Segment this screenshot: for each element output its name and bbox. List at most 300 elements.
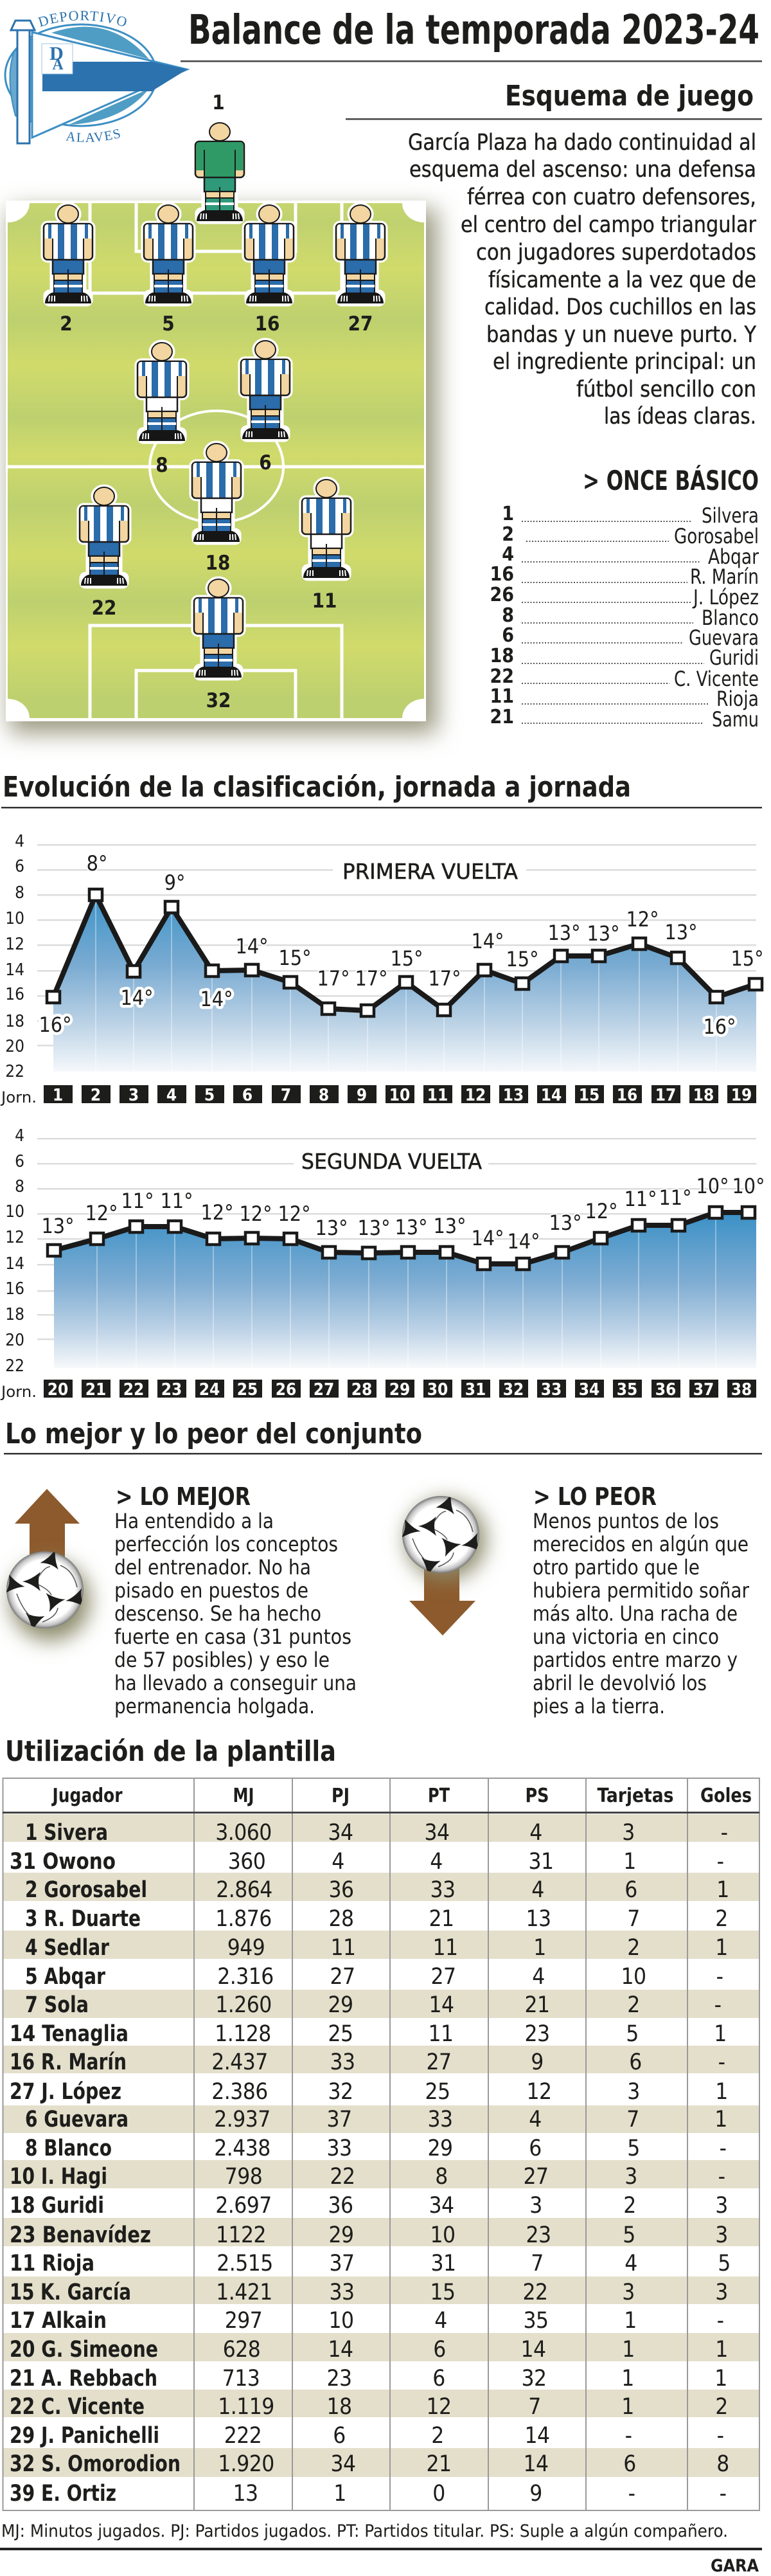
table header: Jugador [51, 1785, 123, 1807]
row: 17 Alkain [10, 2308, 723, 2334]
shirt numbers: 22 [92, 597, 116, 620]
jornada axis: 20 to 38: 21 [85, 1380, 106, 1400]
row: 31 Owono: 4 [332, 1849, 344, 1875]
text block: lo peor: hubiera permitido soñar [533, 1578, 749, 1603]
text block: esquema description: fútbol sencillo con [576, 377, 756, 402]
row: 32 S. Omorodion: 14 [523, 2451, 549, 2477]
row: 5 Abqar: 27 [330, 1964, 355, 1990]
row: 31 Owono: 4 [430, 1849, 443, 1875]
jornada axis: 1 to 19: 11 [427, 1086, 448, 1105]
chart: primera vuelta: 22 [5, 1062, 24, 1081]
row: 10 I. Hagi: 27 [523, 2164, 549, 2190]
row: 14 Tenaglia: 11 [428, 2021, 454, 2047]
jornada axis: 20 to 38: 32 [503, 1380, 524, 1400]
club crest: Deportivo Alavés: ALAVES [66, 129, 120, 142]
row: 5 Abqar: 2.316 [217, 1964, 274, 1990]
row: 6 Guevara: 2.937 [214, 2107, 270, 2132]
row: 2 Gorosabel [25, 1877, 729, 1903]
row: 17 Alkain: 4 [434, 2308, 447, 2334]
row: 18 Guridi: 2 [623, 2193, 636, 2219]
row: 8 Blanco: 5 [627, 2136, 640, 2161]
chart: segunda vuelta: 6 [15, 1152, 24, 1171]
chart: primera vuelta [5, 832, 764, 1081]
chart: primera vuelta: PRIMERA VUELTA [342, 859, 518, 884]
list: once básico: 11 [490, 685, 514, 708]
text block: lo mejor: permanencia holgada. [114, 1694, 315, 1718]
row: 31 Owono: 31 [528, 1849, 554, 1875]
jornada axis: 1 to 19: 5 [204, 1086, 215, 1105]
list: once básico: R. Marín [690, 564, 759, 589]
chart: primera vuelta: 16° [39, 1013, 72, 1037]
player: midfielder 6 [241, 341, 290, 439]
row: 21 A. Rebbach: 21 A. Rebbach [10, 2366, 157, 2391]
chart: segunda vuelta: 12° [585, 1199, 618, 1223]
chart: primera vuelta: 14 [5, 960, 24, 980]
jornada axis: 20 to 38: 24 [199, 1380, 220, 1400]
chart: primera vuelta: 15° [731, 946, 764, 971]
jornada axis: 20 to 38: 31 [465, 1380, 486, 1400]
text block: esquema description: físicamente a la vez que de [488, 267, 756, 293]
footnote: table legend: MJ: Minutos jugados. PJ: Partidos jugados. PT: Partidos titular. PS: Suple a algún compañero. [1, 2521, 728, 2541]
row: 29 J. Panichelli [10, 2423, 723, 2449]
row: 14 Tenaglia: 1.128 [215, 2021, 271, 2047]
icon: arrow up with ball [6, 1489, 90, 1641]
row: 21 A. Rebbach [10, 2366, 727, 2391]
list: once básico [490, 503, 759, 732]
row: 5 Abqar: - [716, 1964, 723, 1990]
text block: lo peor: una victoria en cinco [533, 1625, 719, 1649]
row: 4 Sedlar: 1 [715, 1935, 728, 1961]
shirt numbers: 16 [255, 312, 279, 336]
row: 16 R. Marín: 9 [531, 2049, 544, 2075]
row: 16 R. Marín: 16 R. Marín [10, 2049, 127, 2075]
chart: segunda vuelta: 8 [15, 1177, 24, 1196]
text block: esquema description [408, 130, 757, 429]
jornada axis: 1 to 19: 3 [128, 1086, 139, 1105]
player: winger 11 [302, 480, 351, 578]
row: 22 C. Vicente: 18 [326, 2394, 352, 2420]
row: 29 J. Panichelli: 2 [431, 2423, 444, 2449]
row: 18 Guridi: 2.697 [215, 2193, 272, 2219]
text block: lo mejor: descenso. Se ha hecho [114, 1601, 321, 1626]
player: defender 27 [336, 205, 385, 303]
chart: segunda vuelta: 13° [549, 1211, 582, 1235]
row: 16 R. Marín: - [718, 2049, 725, 2075]
row: 21 A. Rebbach: 1 [621, 2366, 634, 2391]
jornada axis: 20 to 38: 38 [731, 1380, 752, 1400]
jornada axis: 1 to 19: 15 [579, 1086, 599, 1105]
list: once básico: Guevara [689, 626, 759, 650]
text block: lo mejor [114, 1482, 357, 1718]
row: 2 Gorosabel: 1 [716, 1877, 729, 1903]
chart: primera vuelta: 13° [664, 920, 698, 944]
chart: segunda vuelta: 13° [357, 1216, 391, 1240]
row: 27 J. López: 25 [425, 2079, 450, 2105]
row: 2 Gorosabel: 36 [328, 1877, 354, 1903]
jornada axis: 1 to 19: 8 [319, 1086, 329, 1105]
chart: primera vuelta: 4 [15, 832, 24, 851]
jornada axis: 20 to 38: 27 [314, 1380, 334, 1400]
row: 27 J. López: 3 [627, 2079, 640, 2105]
row: 6 Guevara: 7 [626, 2107, 639, 2132]
text block: esquema description: férrea con cuatro defensores, [467, 185, 756, 210]
panel: football pitch [6, 201, 437, 733]
row: 32 S. Omorodion: 34 [330, 2451, 356, 2477]
table header [51, 1785, 752, 1807]
jornada axis: 20 to 38: 36 [655, 1380, 676, 1400]
row: 20 G. Simeone: 6 [433, 2337, 446, 2363]
row: 4 Sedlar: 11 [432, 1935, 458, 1961]
row: 23 Benavídez: 3 [715, 2222, 728, 2248]
row: 39 E. Ortiz: 13 [233, 2481, 258, 2507]
row: 4 Sedlar: 4 Sedlar [25, 1935, 109, 1961]
row: 31 Owono: - [717, 1849, 723, 1875]
row: 22 C. Vicente: 1.119 [218, 2394, 274, 2420]
row: 20 G. Simeone [10, 2337, 728, 2363]
row: 1 Sivera [25, 1820, 727, 1846]
row: 20 G. Simeone: 20 G. Simeone [10, 2337, 158, 2363]
row: 16 R. Marín: 33 [330, 2049, 355, 2075]
row: 1 Sivera: - [721, 1820, 727, 1846]
chart: primera vuelta: 15° [506, 947, 539, 971]
table header: PT [428, 1785, 450, 1807]
jornada axis: 20 to 38: 25 [237, 1380, 258, 1400]
row: 1 Sivera: 3 [622, 1820, 635, 1846]
row: 11 Rioja: 5 [718, 2251, 731, 2276]
chart: segunda vuelta: 16 [5, 1279, 24, 1299]
text block: lo peor: abril le devolvió los [533, 1671, 707, 1695]
chart: segunda vuelta: 11° [160, 1189, 193, 1213]
text block: lo mejor: de 57 posibles) y eso le [114, 1648, 330, 1672]
row: 22 C. Vicente: 12 [426, 2394, 452, 2420]
chart: segunda vuelta: SEGUNDA VUELTA [301, 1149, 483, 1174]
row: 31 Owono: 360 [228, 1849, 265, 1875]
row: 7 Sola: 21 [524, 1992, 550, 2018]
row: 39 E. Ortiz [10, 2481, 726, 2507]
shirt numbers: 8 [155, 454, 168, 477]
row: 16 R. Marín [10, 2049, 725, 2075]
chart: segunda vuelta: 10° [696, 1174, 729, 1198]
row: 11 Rioja: 4 [625, 2251, 637, 2276]
list: once básico: Rioja [716, 687, 759, 711]
club crest: Deportivo Alavés [4, 10, 190, 144]
chart: segunda vuelta: 18 [5, 1305, 24, 1324]
row: 7 Sola: - [714, 1992, 721, 2018]
row: 14 Tenaglia: 1 [714, 2021, 727, 2047]
row: 6 Guevara: 37 [326, 2107, 352, 2132]
row: 2 Gorosabel: 2 Gorosabel [25, 1877, 147, 1903]
row: 23 Benavídez [10, 2222, 728, 2248]
row: 3 R. Duarte: 3 R. Duarte [25, 1906, 141, 1932]
player: striker 32 [194, 579, 243, 678]
chart: segunda vuelta: 4 [15, 1126, 24, 1146]
player: forward 18 [192, 444, 241, 542]
row: 15 K. García [10, 2280, 728, 2305]
row: 15 K. García: 1.421 [216, 2280, 272, 2305]
row: 7 Sola: 14 [429, 1992, 454, 2018]
row: 22 C. Vicente: 22 C. Vicente [10, 2394, 145, 2420]
chart: segunda vuelta: 14° [471, 1226, 504, 1250]
text block: lo mejor: del entrenador. No ha [114, 1555, 311, 1580]
jornada axis: 1 to 19: 10 [389, 1086, 410, 1105]
chart: segunda vuelta: 12° [239, 1202, 272, 1226]
row: 27 J. López: 12 [526, 2079, 552, 2105]
row: 14 Tenaglia: 23 [524, 2021, 550, 2047]
chart: segunda vuelta: 11° [121, 1189, 154, 1213]
text block: lo mejor: > LO MEJOR [116, 1482, 251, 1511]
row: 5 Abqar: 4 [532, 1964, 545, 1990]
row: 11 Rioja: 2.515 [217, 2251, 273, 2276]
row: 11 Rioja: 31 [430, 2251, 456, 2276]
row: 27 J. López: 1 [715, 2079, 728, 2105]
chart: segunda vuelta: 10° [732, 1174, 765, 1198]
row: 32 S. Omorodion: 1.920 [218, 2451, 274, 2477]
row: 14 Tenaglia [10, 2021, 727, 2047]
row: 3 R. Duarte: 21 [429, 1906, 454, 1932]
chart: segunda vuelta [5, 1126, 765, 1376]
text block: lo peor: pies a la tierra. [533, 1694, 665, 1718]
list: once básico: Blanco [702, 606, 759, 630]
text block: lo mejor: pisado en puestos de [114, 1578, 308, 1603]
list: once básico: 18 [490, 645, 514, 667]
shirt numbers: 6 [259, 451, 272, 474]
jornada axis: 1 to 19: 19 [731, 1086, 752, 1105]
row: 17 Alkain: 10 [328, 2308, 354, 2334]
row: 23 Benavídez: 23 Benavídez [10, 2222, 151, 2248]
row: 11 Rioja: 7 [531, 2251, 544, 2276]
row: 2 Gorosabel: 2.864 [216, 1877, 272, 1903]
row: 3 R. Duarte [25, 1906, 728, 1932]
row: 27 J. López: 27 J. López [10, 2079, 121, 2105]
row: 3 R. Duarte: 7 [627, 1906, 640, 1932]
row: 39 E. Ortiz: 39 E. Ortiz [10, 2481, 116, 2507]
text block: esquema description: bandas y un nueve purto. Y [486, 322, 757, 348]
list: once básico: C. Vicente [674, 667, 759, 691]
row: 5 Abqar [25, 1964, 723, 1990]
player: defender 16 [245, 205, 294, 303]
jornada axis: 1 to 19 [0, 1085, 756, 1106]
chart: primera vuelta: 14° [471, 929, 504, 953]
row: 15 K. García: 33 [329, 2280, 355, 2305]
row: 21 A. Rebbach: 6 [432, 2366, 445, 2391]
row: 29 J. Panichelli: 29 J. Panichelli [10, 2423, 159, 2449]
chart: primera vuelta: 20 [5, 1037, 24, 1056]
row: 6 Guevara: 1 [714, 2107, 727, 2132]
jornada axis: 1 to 19: Jorn. [0, 1088, 37, 1106]
row: 14 Tenaglia: 14 Tenaglia [10, 2021, 128, 2047]
shirt numbers: 2 [60, 312, 73, 336]
row: 20 G. Simeone: 1 [622, 2337, 635, 2363]
jornada axis: 20 to 38: 20 [48, 1380, 68, 1400]
chart: primera vuelta: 17° [428, 966, 461, 991]
shirt numbers: 27 [348, 312, 373, 336]
chart: primera vuelta: 13° [547, 921, 581, 945]
list: once básico: Samu [712, 707, 759, 732]
row: 10 I. Hagi: 10 I. Hagi [10, 2164, 107, 2190]
row: 10 I. Hagi [10, 2164, 725, 2190]
row: 7 Sola: 2 [627, 1992, 640, 2018]
row: 8 Blanco: - [720, 2136, 726, 2161]
row: 16 R. Marín: 2.437 [211, 2049, 268, 2075]
chart: segunda vuelta: 13° [433, 1214, 466, 1238]
chart: primera vuelta: 12° [626, 907, 659, 932]
row: 17 Alkain: - [717, 2308, 723, 2334]
row: 18 Guridi: 3 [715, 2193, 728, 2219]
row: 4 Sedlar: 2 [627, 1935, 640, 1961]
list: once básico: 22 [490, 665, 514, 688]
jornada axis: 1 to 19: 4 [166, 1086, 177, 1105]
row: 20 G. Simeone: 1 [715, 2337, 728, 2363]
jornada axis: 20 to 38: 29 [389, 1380, 410, 1400]
club crest: Deportivo Alavés: DEPORTIVO [37, 10, 127, 27]
jornada axis: 1 to 19: 17 [655, 1086, 676, 1105]
list: once básico: Silvera [702, 503, 759, 528]
shirt numbers [60, 91, 373, 712]
row: 29 J. Panichelli: 6 [333, 2423, 346, 2449]
text block: esquema description: con jugadores superdotados [476, 240, 756, 266]
text block: lo peor: más alto. Una racha de [533, 1601, 738, 1626]
row: 23 Benavídez: 29 [328, 2222, 354, 2248]
list: once básico: 4 [502, 543, 514, 566]
row: 15 K. García: 3 [622, 2280, 635, 2305]
row: 6 Guevara [25, 2107, 727, 2132]
list: once básico: 1 [502, 503, 514, 525]
list: once básico: 26 [490, 584, 514, 606]
row: 27 J. López [10, 2079, 728, 2105]
shirt numbers: 32 [206, 689, 231, 712]
player: winger 22 [80, 487, 128, 586]
chart: segunda vuelta: 22 [5, 1356, 24, 1376]
list: once básico: 2 [502, 523, 514, 546]
list: once básico: 21 [490, 706, 514, 728]
row: 10 I. Hagi: - [718, 2164, 725, 2190]
chart: segunda vuelta: 14° [507, 1229, 540, 1254]
row: 1 Sivera: 3.060 [215, 1820, 272, 1846]
row: 21 A. Rebbach: 713 [222, 2366, 260, 2391]
row: 39 E. Ortiz: 9 [529, 2481, 542, 2507]
row: 20 G. Simeone: 14 [328, 2337, 353, 2363]
chart: primera vuelta: 14° [200, 987, 233, 1011]
row: 6 Guevara: 6 Guevara [25, 2107, 128, 2132]
jornada axis: 20 to 38: 30 [427, 1380, 448, 1400]
row: 4 Sedlar: 1 [533, 1935, 546, 1961]
jornada axis: 1 to 19: 18 [693, 1086, 714, 1105]
player: goalkeeper 1 [195, 123, 244, 221]
row: 31 Owono: 31 Owono [10, 1849, 116, 1875]
row: 1 Sivera: 34 [328, 1820, 353, 1846]
chart: segunda vuelta: 12° [85, 1201, 118, 1225]
row: 32 S. Omorodion: 32 S. Omorodion [10, 2451, 181, 2477]
list: once básico: Guridi [709, 645, 759, 670]
chart: primera vuelta: 14° [235, 934, 269, 959]
row: 2 Gorosabel: 6 [625, 1877, 637, 1903]
chart: primera vuelta: 13° [587, 921, 620, 946]
row: 8 Blanco: 8 Blanco [25, 2136, 112, 2161]
club crest: Deportivo Alavés: A [52, 57, 64, 73]
text block: lo peor: otro partido que le [533, 1555, 700, 1580]
text block: esquema description: el ingrediente principal: un [493, 349, 756, 375]
row: 17 Alkain: 297 [225, 2308, 262, 2334]
list: once básico: 16 [490, 563, 514, 586]
row: 15 K. García: 15 [430, 2280, 456, 2305]
text block: esquema description: García Plaza ha dado continuidad al [408, 130, 756, 156]
row: 29 J. Panichelli: - [717, 2423, 723, 2449]
row: 39 E. Ortiz: 0 [432, 2481, 445, 2507]
row: 8 Blanco: 29 [427, 2136, 453, 2161]
row: 32 S. Omorodion: 8 [716, 2451, 729, 2477]
row: 32 S. Omorodion [10, 2451, 729, 2477]
text block: lo peor [533, 1482, 749, 1718]
chart: primera vuelta: 15° [278, 946, 312, 970]
row: 14 Tenaglia: 5 [626, 2021, 639, 2047]
jornada axis: 20 to 38: 35 [617, 1380, 637, 1400]
jornada axis: 20 to 38 [0, 1380, 756, 1401]
row: 15 K. García: 3 [715, 2280, 728, 2305]
text block: esquema description: el centro del campo triangular [461, 212, 756, 238]
text block: lo peor: partidos entre marzo y [533, 1648, 738, 1672]
row: 18 Guridi: 3 [529, 2193, 542, 2219]
row: 22 C. Vicente: 7 [528, 2394, 541, 2420]
row: 21 A. Rebbach: 23 [326, 2366, 352, 2391]
row: 27 J. López: 2.386 [211, 2079, 268, 2105]
chart: primera vuelta: 17° [317, 966, 350, 991]
chart: primera vuelta: 6 [15, 857, 24, 876]
list: once básico: Gorosabel [674, 524, 759, 548]
row: 27 J. López: 32 [328, 2079, 353, 2105]
row: 1 Sivera: 4 [529, 1820, 542, 1846]
row: 8 Blanco: 2.438 [214, 2136, 270, 2161]
text block: esquema description: calidad. Dos cuchillos en las [484, 294, 756, 320]
row: 11 Rioja [10, 2251, 731, 2276]
chart: segunda vuelta: 12° [200, 1200, 234, 1225]
row: 18 Guridi: 18 Guridi [10, 2193, 104, 2219]
row: 3 R. Duarte: 2 [715, 1906, 728, 1932]
heading: evolución de la clasificación: Evolución de la clasificación, jornada a jornada [3, 771, 631, 804]
row: 29 J. Panichelli: 14 [524, 2423, 550, 2449]
row: 15 K. García: 15 K. García [10, 2280, 131, 2305]
chart: primera vuelta: 17° [355, 966, 388, 991]
jornada axis: 1 to 19: 9 [357, 1086, 367, 1105]
icon: arrow down with ball [402, 1491, 486, 1635]
list: once básico: Abqar [708, 545, 759, 569]
row: 8 Blanco: 6 [529, 2136, 542, 2161]
row: 2 Gorosabel: 33 [430, 1877, 456, 1903]
text block: esquema description: las ídeas claras. [604, 404, 756, 429]
row: 17 Alkain: 1 [624, 2308, 637, 2334]
row: 2 Gorosabel: 4 [531, 1877, 544, 1903]
player: midfielder 8 [137, 343, 186, 441]
chart: primera vuelta: 8° [87, 851, 107, 876]
row: 22 C. Vicente: 2 [715, 2394, 728, 2420]
row: 8 Blanco [25, 2136, 726, 2161]
row: 7 Sola: 1.260 [215, 1992, 272, 2018]
row: 39 E. Ortiz: - [720, 2481, 726, 2507]
row: 23 Benavídez: 5 [623, 2222, 635, 2248]
row: 10 I. Hagi: 798 [225, 2164, 262, 2190]
jornada axis: 20 to 38: 28 [351, 1380, 372, 1400]
list: once básico: 8 [502, 604, 514, 627]
jornada axis: 1 to 19: 1 [53, 1086, 63, 1105]
player: defender 5 [144, 205, 193, 303]
row: 39 E. Ortiz: 1 [333, 2481, 346, 2507]
chart: primera vuelta: 10 [5, 909, 24, 928]
row: 16 R. Marín: 27 [426, 2049, 452, 2075]
row: 39 E. Ortiz: - [628, 2481, 635, 2507]
text block: lo peor: > LO PEOR [533, 1482, 657, 1511]
row: 29 J. Panichelli: 222 [224, 2423, 261, 2449]
row: 8 Blanco: 33 [326, 2136, 352, 2161]
row: 7 Sola: 7 Sola [25, 1992, 89, 2018]
